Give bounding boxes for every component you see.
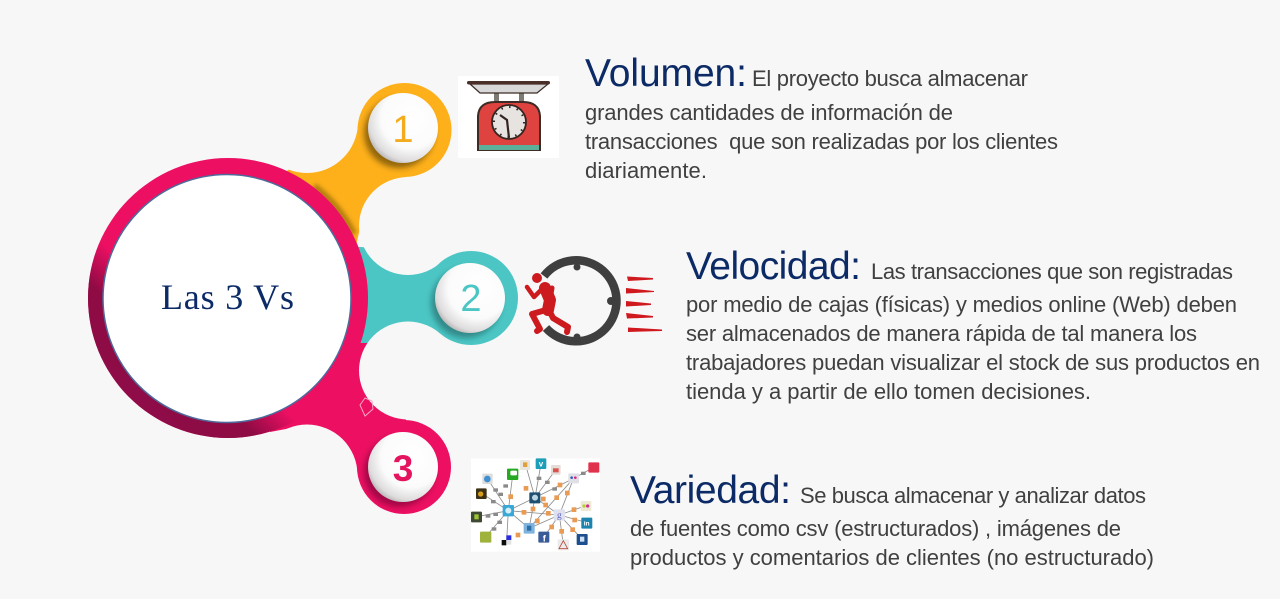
body: Velocidad: trabajadores puedan visualizar el stock de sus productos en: [686, 350, 1260, 375]
branch 2: teal connector: [345, 246, 471, 350]
text block: Volumen: [585, 52, 1058, 183]
background cut-outs between branches: [256, 71, 457, 526]
heading: Volumen: Volumen:: [585, 52, 747, 95]
running figure: [527, 273, 568, 332]
ball 1: [364, 93, 438, 168]
body: Velocidad: ser almacenados de manera rápida de tal manera los: [686, 321, 1197, 346]
hub centre circle: [103, 174, 351, 422]
branch 1: yellow connector: [280, 126, 406, 250]
disc 2: [424, 251, 518, 345]
disc 1: [358, 83, 452, 177]
ball 3: [364, 432, 438, 507]
body: Variedad: [630, 483, 1154, 570]
ball 2: 2: [460, 278, 482, 320]
shadow of hub on yellow branch: [314, 186, 354, 234]
text block: Variedad: [630, 469, 1154, 570]
clock ring: [544, 260, 617, 341]
social nodes: f: [543, 533, 547, 543]
icon: kitchen scale: [458, 76, 559, 158]
body: Velocidad: [686, 259, 1260, 404]
hub title: Las 3 Vs: [161, 277, 294, 317]
speed lines: [626, 276, 662, 332]
branch 3: pink connector: [270, 330, 406, 471]
disc 3: [357, 420, 451, 514]
hub ring: [88, 158, 368, 438]
icon: runner in a clock ring: [527, 260, 662, 341]
body: Velocidad: tienda y a partir de ello tomen decisiones.: [686, 379, 1091, 404]
body: Variedad: de fuentes como csv (estructurados) , imágenes de: [630, 516, 1121, 541]
body: Velocidad: Las transacciones que son registradas: [871, 259, 1233, 284]
icon: social network graph: [471, 458, 600, 552]
body: Volumen: El proyecto busca almacenar: [752, 66, 1028, 91]
body: Variedad: productos y comentarios de clientes (no estructurado): [630, 545, 1154, 570]
body: Volumen: grandes cantidades de información de: [585, 100, 953, 125]
ball 3: 3: [393, 448, 413, 489]
social nodes: in: [584, 521, 590, 528]
text block: Velocidad: [686, 245, 1260, 404]
social nodes: g: [557, 511, 562, 521]
ball 2: [431, 263, 505, 338]
body: Volumen: transacciones que son realizadas por los clientes: [585, 129, 1058, 154]
body: Volumen: [585, 66, 1058, 183]
diagram: hub and three branches: [88, 71, 518, 526]
social nodes: v: [539, 459, 544, 468]
social nodes: [471, 458, 599, 550]
watermark mark on pink branch: [360, 398, 373, 416]
heading: Variedad: Variedad:: [630, 469, 791, 512]
body: Variedad: Se busca almacenar y analizar datos: [800, 483, 1146, 508]
hub ring dark crescent: [88, 158, 368, 438]
ball 1: 1: [392, 109, 414, 151]
body: Velocidad: por medio de cajas (físicas) y medios online (Web) deben: [686, 292, 1237, 317]
heading: Velocidad: Velocidad:: [686, 245, 861, 288]
body: Volumen: diariamente.: [585, 158, 707, 183]
